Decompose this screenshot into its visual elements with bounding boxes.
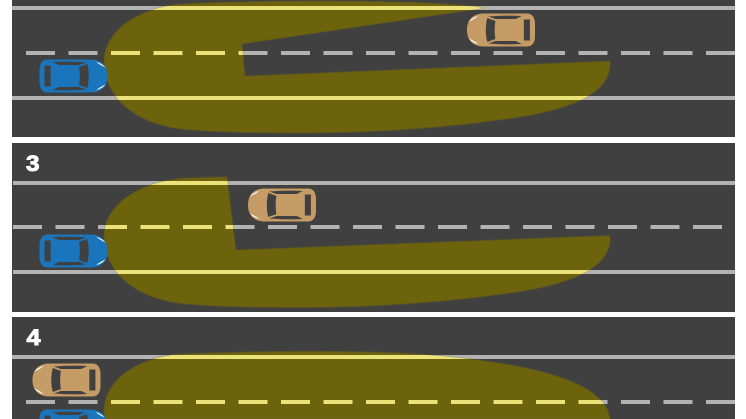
headlight beam xyxy=(104,177,610,308)
road edge lines and centre dashes xyxy=(12,6,735,100)
panel: scene 4 road with full beam after car passes xyxy=(12,317,735,419)
lit road markings xyxy=(111,355,604,404)
headlight beam xyxy=(104,1,610,133)
icon: tan oncoming car xyxy=(467,14,535,46)
icon: tan oncoming car xyxy=(248,188,316,222)
panel: scene 2 road with notched beam around oncoming car xyxy=(12,0,735,137)
panel: scene 3 road with beam cut off near oncoming car xyxy=(12,143,735,312)
road edge lines and centre dashes xyxy=(12,355,735,402)
headlight beam xyxy=(104,351,610,419)
icon: blue car xyxy=(40,60,108,92)
lit road markings xyxy=(111,6,588,100)
icon: blue car xyxy=(40,234,108,268)
icon: blue car cut off by the frame xyxy=(40,410,106,419)
road edge lines and centre dashes xyxy=(13,181,735,274)
scene number 3: 3 xyxy=(26,151,40,176)
icon: tan car passing xyxy=(32,364,100,396)
lit road markings xyxy=(104,181,590,274)
scene number 4: 4 xyxy=(26,325,41,350)
